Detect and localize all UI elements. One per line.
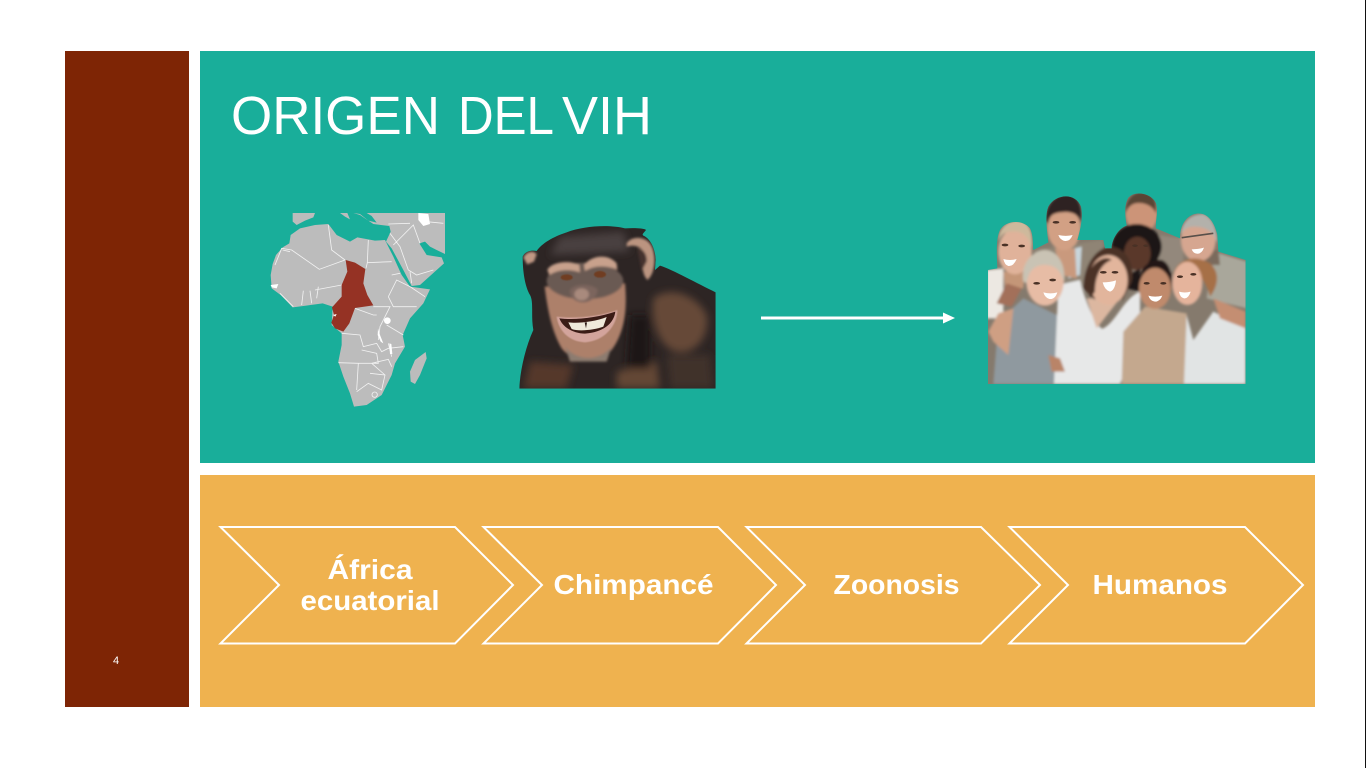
arms [988, 308, 1013, 355]
chevron: Chimpancé: Chimpancé [554, 569, 714, 600]
chevron: Zoonosis: Zoonosis [834, 569, 960, 600]
mouth [557, 310, 617, 342]
title: ORIGEN [231, 86, 440, 146]
ears [523, 238, 655, 280]
window edge [1365, 0, 1366, 768]
chevron: África ecuatorial: ecuatorial [300, 585, 440, 616]
front row heads [1026, 258, 1064, 306]
face [545, 257, 626, 362]
icon: map of Africa [271, 213, 445, 407]
front row clothes [993, 298, 1060, 384]
back row faces and hair [1003, 272, 1025, 288]
eyes [561, 274, 573, 280]
panel: teal header area [200, 51, 1315, 463]
chevron process [220, 527, 1303, 644]
chevron: Zoonosis [746, 527, 1040, 644]
Europe and Middle East land [293, 213, 445, 286]
smiles [1003, 235, 1204, 302]
title: DEL [458, 86, 554, 146]
panel: amber process area [200, 475, 1315, 707]
slide number: 4 [113, 655, 119, 667]
icon: group of people [988, 194, 1246, 384]
title [231, 86, 652, 146]
lakes and coast highlights [271, 213, 430, 354]
country borders [275, 222, 443, 397]
back row clothes [1033, 240, 1105, 285]
chevron: Humanos: Humanos [1092, 569, 1228, 600]
chevron: Chimpancé [484, 527, 776, 644]
chevron: África ecuatorial: África [328, 554, 413, 585]
Madagascar [410, 352, 427, 384]
chevron: Humanos [1010, 527, 1303, 644]
arrow [761, 312, 955, 324]
title: VIH [562, 86, 652, 146]
panel: sidebar [65, 51, 189, 707]
Africa landmass [271, 224, 430, 407]
icon: smiling chimpanzee [519, 226, 716, 389]
highlighted equatorial region [331, 260, 373, 332]
chevron: África ecuatorial [220, 527, 513, 644]
body fur highlights [523, 232, 713, 388]
eyes and glasses [1002, 221, 1196, 285]
